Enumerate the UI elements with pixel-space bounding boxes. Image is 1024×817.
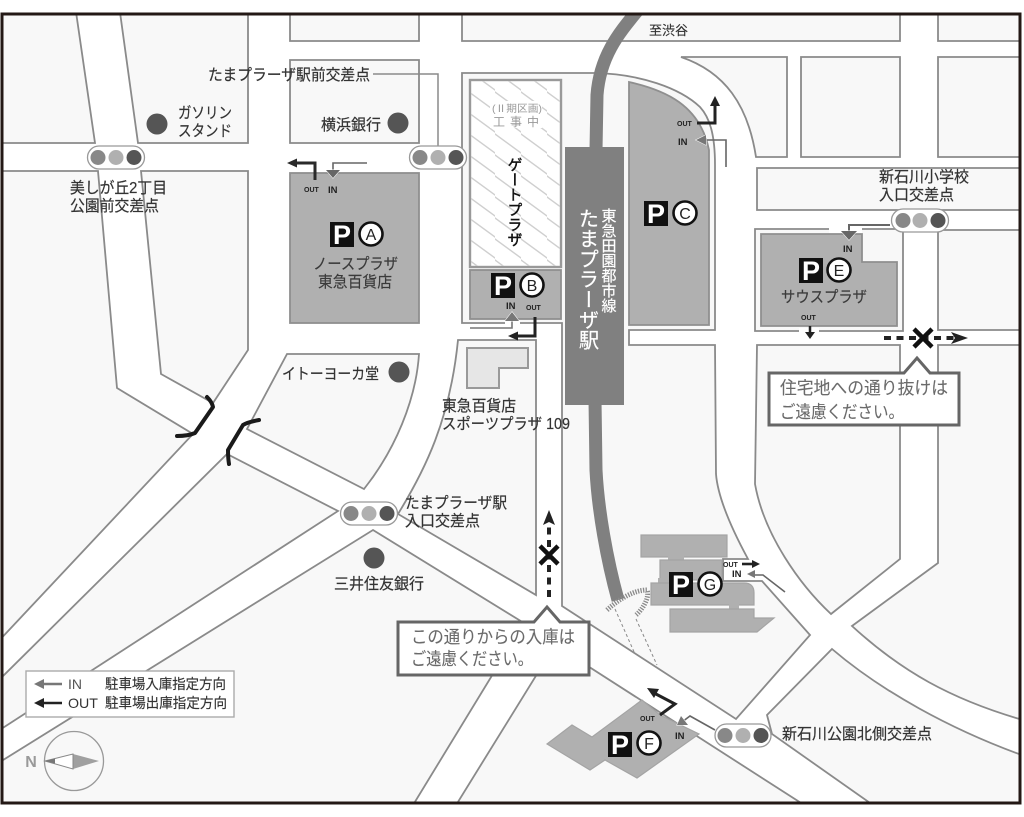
callout: no entry from this street: この通りからの入庫は <box>411 627 575 647</box>
arrows: G in/out: OUT <box>723 562 738 569</box>
no-through arrow: residential <box>884 329 968 347</box>
parking F <box>547 700 699 778</box>
P mark G: P <box>672 570 690 600</box>
label: Tokyu Sports Plaza 109: 東急百貨店 <box>442 397 516 415</box>
label: Ito-Yokado: イトーヨーカ堂 <box>282 365 379 383</box>
P mark F <box>608 732 632 757</box>
railway name: 東急田園都市線 <box>600 208 616 313</box>
arrows: A in/out: OUT <box>304 187 320 194</box>
P mark A <box>330 222 354 247</box>
traffic signal: station-front <box>410 146 466 169</box>
leader line: station-front crossing <box>373 74 438 146</box>
label: Yokohama Bank: 横浜銀行 <box>321 116 381 134</box>
arrows: G in/out <box>723 560 785 592</box>
road crossing marks <box>177 397 259 464</box>
compass <box>25 732 104 790</box>
parking E: South Plaza <box>761 234 897 326</box>
callout: residential area: ご遠慮ください。 <box>780 402 904 422</box>
compass: N <box>25 754 37 771</box>
arrows: F in/out <box>640 688 715 742</box>
arrows: C in/out: OUT <box>677 121 692 128</box>
label: Tokyu Sports Plaza 109 <box>442 397 570 433</box>
label: school crossing <box>879 168 969 204</box>
letter F <box>638 732 660 754</box>
arrows: F in/out: IN <box>675 731 685 742</box>
arrows: A in/out <box>287 158 367 196</box>
landmark dot: gas station <box>146 114 168 134</box>
label: gas station: ガソリン <box>178 104 232 122</box>
label: station entrance crossing: たまプラーザ駅 <box>405 494 507 512</box>
letter C: C <box>679 206 691 223</box>
parking G <box>641 535 774 632</box>
construction note: 工事中 <box>493 114 539 129</box>
station building <box>565 147 624 405</box>
landmark dot: Yokohama Bank <box>388 112 408 134</box>
North Plaza label: ノースプラザ <box>313 255 398 273</box>
P mark B: P <box>494 271 512 301</box>
label: gas station: スタンド <box>178 122 232 140</box>
label: station entrance crossing: 入口交差点 <box>405 512 480 530</box>
label: Utsukushigaoka crossing: 美しが丘2丁目 <box>70 179 167 197</box>
arrows: E in/out <box>801 225 890 339</box>
label: school crossing: 入口交差点 <box>879 186 954 204</box>
label: Tokyu Sports Plaza 109: スポーツプラザ 109 <box>442 415 570 433</box>
traffic signal: Shin-Ishikawa school <box>892 209 948 232</box>
station name: たまプラーザ駅 <box>575 208 599 351</box>
arrows: C in/out <box>677 96 726 167</box>
label: Utsukushigaoka crossing <box>70 179 167 215</box>
no-entry arrow: street <box>540 510 558 597</box>
legend <box>26 671 234 717</box>
label: SMBC: 三井住友銀行 <box>334 575 424 593</box>
arrows: A in/out: IN <box>328 185 338 196</box>
legend: IN row: 駐車場入庫指定方向 <box>105 676 226 692</box>
parking B <box>470 270 561 319</box>
arrows: B in/out <box>470 301 542 340</box>
label: to Shibuya: 至渋谷 <box>649 23 688 38</box>
arrows: G in/out: IN <box>732 569 742 580</box>
label: station entrance crossing <box>405 494 507 530</box>
label: school crossing: 新石川小学校 <box>879 168 969 186</box>
railway line: Den-en-toshi <box>595 10 638 600</box>
P mark C <box>644 201 668 226</box>
arrows: B in/out: OUT <box>526 305 542 312</box>
arrows: F in/out: OUT <box>640 716 656 723</box>
letter F: F <box>644 736 654 753</box>
callout: no entry from this street: ご遠慮ください。 <box>411 649 533 669</box>
letter B: B <box>527 278 537 295</box>
legend: OUT row <box>34 695 227 711</box>
letter A <box>360 222 382 246</box>
callout: residential area: 住宅地への通り抜けは <box>780 378 948 398</box>
arrows: E in/out: IN <box>843 244 853 255</box>
legend: OUT row: OUT <box>68 695 98 711</box>
landmark dot: Ito-Yokado <box>388 362 410 382</box>
Gate Plaza label: ゲートプラザ <box>506 157 522 247</box>
traffic signal: station entrance <box>340 502 398 525</box>
legend: OUT row: 駐車場出庫指定方向 <box>105 695 227 711</box>
legend: IN row: IN <box>68 676 82 692</box>
label: park north crossing: 新石川公園北側交差点 <box>782 725 932 743</box>
landmark dot: SMBC <box>364 548 384 568</box>
P mark E: P <box>802 256 820 286</box>
callout: no entry from this street <box>398 607 589 675</box>
phase note: (Ⅱ期区画) <box>492 103 542 115</box>
South Plaza label: サウスプラザ <box>781 288 867 306</box>
traffic signal: Utsukushigaoka <box>88 146 144 169</box>
label: Utsukushigaoka crossing: 公園前交差点 <box>70 197 159 215</box>
label: station-front crossing: たまプラーザ駅前交差点 <box>208 66 370 84</box>
callout: residential area <box>769 358 959 425</box>
label: gas station <box>178 104 232 140</box>
arrows: B in/out: IN <box>506 301 516 312</box>
station tunnel entrance <box>607 590 657 665</box>
P mark A: P <box>333 220 351 250</box>
legend: IN row <box>34 676 226 692</box>
parking A: North Plaza <box>290 173 419 323</box>
traffic signal: park north <box>715 724 771 747</box>
letter C <box>674 202 696 224</box>
arrows: E in/out: OUT <box>801 315 816 322</box>
P mark C: P <box>647 199 665 229</box>
building: Gate Plaza under construction <box>470 80 561 267</box>
P mark F: P <box>611 730 629 760</box>
letter A: A <box>366 227 377 244</box>
parking C <box>629 82 709 325</box>
Tokyu dept label: 東急百貨店 <box>318 273 392 291</box>
building: Tokyu Sports Plaza 109 <box>467 348 528 388</box>
letter E: E <box>834 263 844 280</box>
arrows: C in/out: IN <box>678 137 688 148</box>
letter G: G <box>704 577 716 594</box>
